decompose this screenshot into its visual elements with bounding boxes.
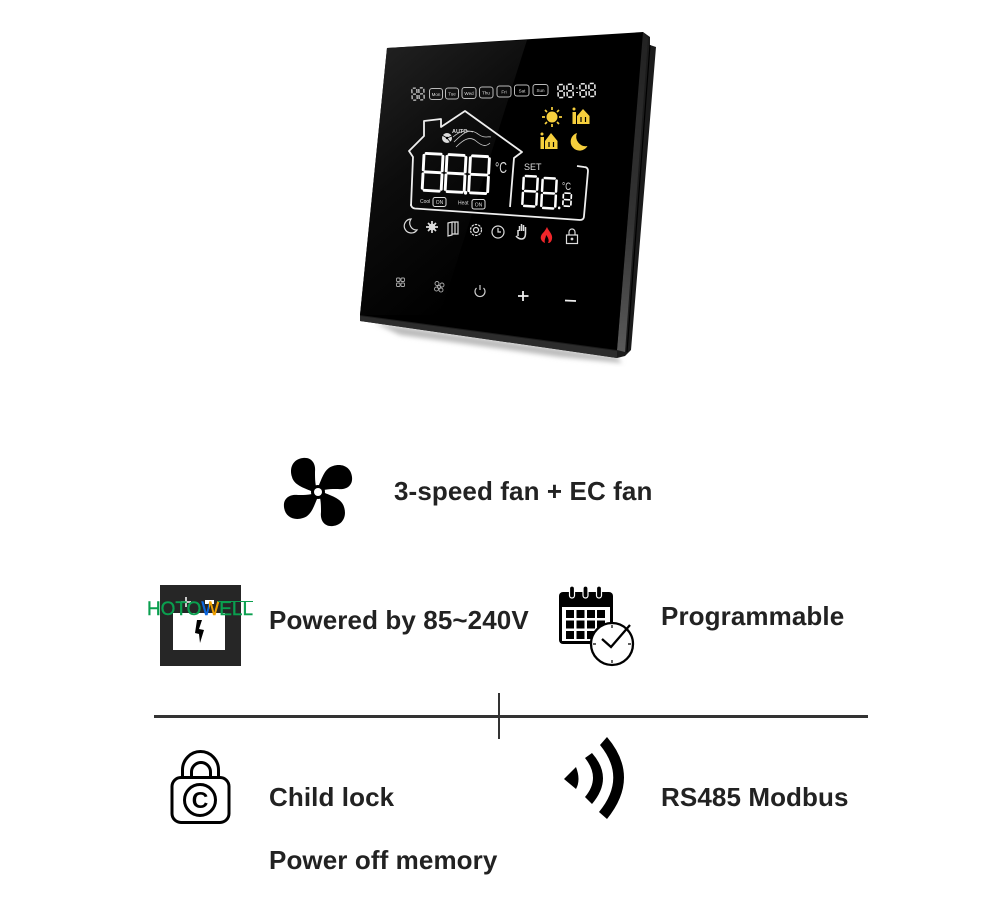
icon: power button bbox=[475, 285, 485, 297]
shadow under device bbox=[375, 323, 622, 363]
glass front face bbox=[360, 32, 643, 350]
feature: fan bbox=[284, 458, 652, 526]
heat status: Heat bbox=[458, 200, 469, 206]
clock digits bbox=[558, 83, 595, 98]
icon: padlock with copyright mark bbox=[172, 752, 229, 822]
mode icon row bbox=[404, 219, 578, 244]
icon: yellow sun bbox=[542, 107, 562, 127]
icon: yellow person home bbox=[572, 108, 590, 124]
icon: sleep moon bbox=[404, 219, 417, 233]
weekday buttons: Wed bbox=[464, 91, 474, 96]
device side edge bbox=[360, 32, 656, 358]
cross divider bbox=[154, 693, 868, 739]
icon: fan with auto and air swirls bbox=[442, 129, 491, 147]
label: programmable: Programmable bbox=[661, 601, 844, 631]
icon: fan bbox=[284, 458, 352, 526]
label: power: Powered by 85~240V bbox=[269, 605, 529, 635]
icon: clock bbox=[492, 226, 504, 238]
icon: calendar with clock bbox=[559, 586, 633, 665]
label: rs485: RS485 Modbus bbox=[661, 782, 849, 812]
weekday buttons: Tue bbox=[448, 92, 456, 96]
heat status bbox=[458, 200, 485, 209]
set label: SET bbox=[524, 162, 542, 172]
icon: battery with power bolt bbox=[160, 585, 241, 666]
lcd display bbox=[396, 83, 595, 301]
feature: child lock bbox=[172, 752, 395, 822]
weekday buttons: Mon bbox=[432, 92, 441, 97]
watermark: brand name: HOTOWELL bbox=[147, 598, 253, 620]
icon: yellow person home 2 bbox=[540, 132, 558, 149]
weekday buttons: Thu bbox=[482, 90, 490, 96]
product photo: thermostat bbox=[360, 32, 656, 363]
icon: gear bbox=[470, 224, 482, 236]
icon: hand bbox=[516, 224, 526, 239]
feature: programmable bbox=[559, 586, 844, 665]
icon: fan with auto and air swirls: AUTO bbox=[452, 129, 468, 135]
cool status bbox=[420, 198, 446, 206]
icon: padlock with copyright mark: C bbox=[192, 787, 208, 813]
glass reflection bbox=[360, 40, 527, 315]
touch button row bbox=[396, 278, 576, 301]
feature: power bbox=[147, 585, 529, 666]
icon: snowflake bbox=[426, 221, 438, 233]
icon: minus button bbox=[565, 300, 576, 302]
icon: menu grid button bbox=[396, 278, 404, 286]
weekday buttons: Fri bbox=[501, 90, 507, 94]
feature: rs485 bbox=[564, 737, 849, 819]
icon: wireless signal bbox=[564, 737, 624, 819]
house outline bbox=[409, 111, 522, 207]
feature: power off memory: Power off memory bbox=[269, 845, 498, 875]
top row: date digits bbox=[412, 88, 424, 100]
main degree unit: °C bbox=[495, 160, 507, 177]
label: child lock: Child lock bbox=[269, 782, 395, 812]
icon: door bbox=[448, 222, 458, 236]
icon: red flame bbox=[541, 227, 552, 243]
cool status: Cool bbox=[420, 199, 430, 205]
set degree unit: °C bbox=[562, 181, 571, 193]
cool status: ON bbox=[436, 200, 444, 206]
heat status: ON bbox=[475, 202, 483, 208]
weekday buttons: Sun bbox=[536, 88, 545, 93]
weekday buttons bbox=[430, 84, 548, 100]
icon: padlock bbox=[566, 229, 578, 244]
icon: plus button bbox=[518, 291, 528, 301]
set temperature digits bbox=[522, 176, 572, 209]
icon: yellow moon bbox=[571, 133, 588, 151]
weekday buttons: Sat bbox=[519, 88, 526, 94]
label: fan: 3-speed fan + EC fan bbox=[394, 476, 652, 506]
set panel outline bbox=[411, 166, 588, 220]
icon: fan button bbox=[434, 282, 444, 292]
main temperature digits 88.8 bbox=[422, 153, 490, 194]
